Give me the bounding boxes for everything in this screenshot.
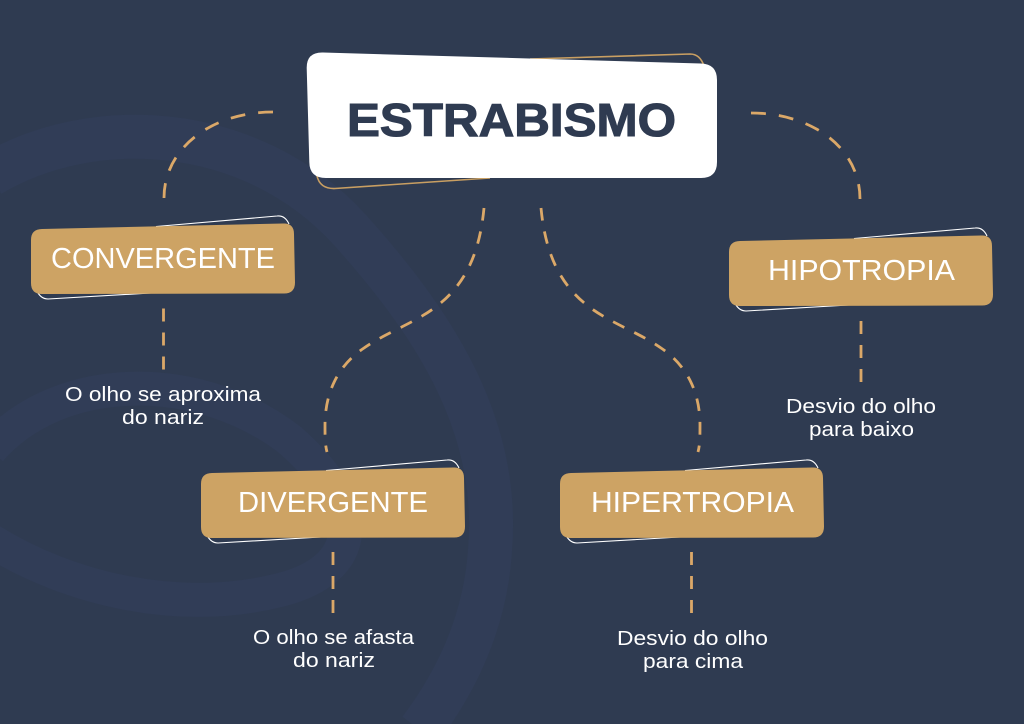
box: hipotropia bbox=[729, 228, 993, 311]
label: divergente: DIVERGENTE bbox=[238, 487, 428, 519]
connector: title to divergente bbox=[325, 208, 484, 452]
title text: ESTRABISMO bbox=[347, 94, 676, 146]
connector: title to hipertropia bbox=[541, 208, 700, 452]
description: hipertropia: para cima bbox=[643, 650, 744, 673]
title panel bbox=[307, 52, 717, 189]
connector: convergente to description bbox=[162, 308, 165, 370]
description: hipotropia: para baixo bbox=[809, 418, 914, 441]
description: divergente bbox=[253, 626, 415, 672]
description: hipertropia: Desvio do olho bbox=[617, 627, 768, 650]
description: hipotropia bbox=[786, 395, 936, 441]
description: divergente: do nariz bbox=[293, 649, 375, 672]
box: divergente bbox=[201, 460, 465, 543]
description: hipertropia bbox=[617, 627, 768, 673]
label: convergente: CONVERGENTE bbox=[51, 243, 275, 275]
label: hipotropia: HIPOTROPIA bbox=[768, 255, 955, 287]
box: convergente bbox=[31, 216, 295, 299]
connector: hipotropia to description bbox=[860, 321, 862, 382]
description: hipotropia: Desvio do olho bbox=[786, 395, 936, 418]
description: divergente: O olho se afasta bbox=[253, 626, 415, 649]
box: hipertropia bbox=[560, 460, 824, 543]
description: convergente: O olho se aproxima bbox=[65, 383, 262, 406]
connector: title to hipotropia bbox=[751, 113, 860, 199]
connector: title to convergente bbox=[164, 112, 273, 198]
label: hipertropia: HIPERTROPIA bbox=[591, 487, 794, 519]
connector: divergente to description bbox=[332, 552, 334, 613]
description: convergente: do nariz bbox=[122, 406, 204, 429]
description: convergente bbox=[65, 383, 262, 429]
connector: hipertropia to description bbox=[690, 552, 693, 613]
background swoosh bbox=[0, 137, 491, 724]
